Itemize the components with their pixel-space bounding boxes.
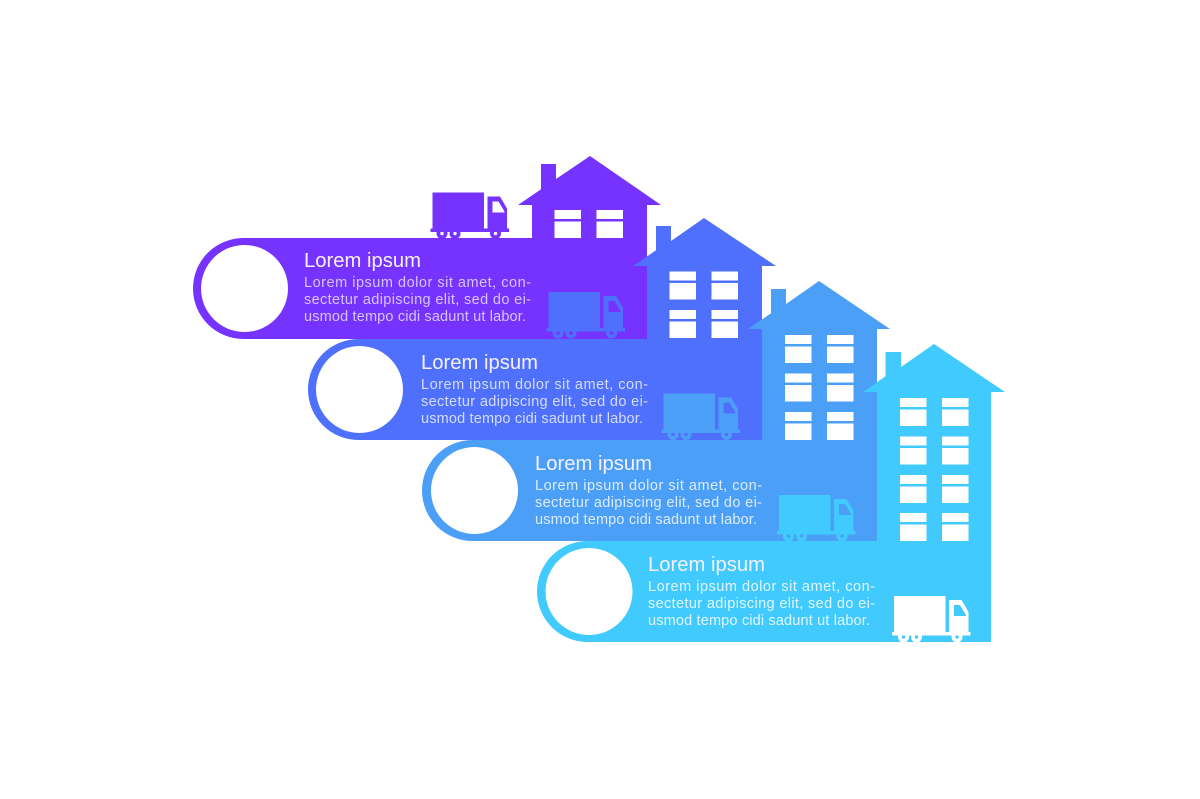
text block 4	[648, 554, 875, 629]
truck 4 on house 3 base	[777, 495, 856, 540]
house 2 silhouette	[308, 218, 776, 440]
body text 3: Lorem ipsum dolor sit amet, con-	[535, 478, 762, 494]
row 2: blue banner and house	[308, 218, 776, 440]
circle placeholder 4	[546, 548, 632, 635]
circle placeholder 1	[201, 245, 288, 332]
body text 1: sectetur adipiscing elit, sed do ei-	[304, 292, 531, 308]
heading 1: Lorem ipsum	[304, 250, 421, 272]
text block 1	[304, 250, 531, 325]
body text 3: sectetur adipiscing elit, sed do ei-	[535, 495, 762, 511]
heading 3: Lorem ipsum	[535, 453, 652, 475]
truck 3	[662, 394, 740, 438]
house 3 silhouette	[422, 281, 890, 541]
body text 4: Lorem ipsum dolor sit amet, con-	[648, 579, 875, 595]
text block 2	[421, 352, 648, 427]
house 4 windows	[900, 398, 968, 541]
house 1 silhouette	[193, 156, 661, 339]
circle placeholder 2	[316, 346, 403, 433]
truck 1 on roofline	[430, 192, 509, 237]
house 4 silhouette	[537, 344, 1005, 642]
row 4: cyan banner and house	[537, 344, 1005, 642]
circle placeholder 3	[431, 447, 518, 534]
body text 4: usmod tempo cidi sadunt ut labor.	[648, 613, 870, 629]
body text 1	[304, 275, 531, 325]
body text 3	[535, 478, 762, 528]
house 3 windows	[785, 335, 854, 440]
body text 2: usmod tempo cidi sadunt ut labor.	[421, 411, 643, 427]
body text 4: sectetur adipiscing elit, sed do ei-	[648, 596, 875, 612]
row 3: mid blue banner and house	[422, 281, 890, 541]
body text 3: usmod tempo cidi sadunt ut labor.	[535, 512, 757, 528]
body text 2: sectetur adipiscing elit, sed do ei-	[421, 394, 648, 410]
truck 2	[546, 292, 625, 337]
row 1: purple banner and house	[193, 156, 661, 339]
truck 5 white	[892, 596, 970, 641]
body text 4	[648, 579, 875, 629]
text block 3	[535, 453, 762, 528]
house 1 windows	[554, 210, 623, 238]
heading 4: Lorem ipsum	[648, 554, 765, 576]
heading 2: Lorem ipsum	[421, 352, 538, 374]
house 2 windows	[670, 272, 738, 338]
body text 1: Lorem ipsum dolor sit amet, con-	[304, 275, 531, 291]
body text 1: usmod tempo cidi sadunt ut labor.	[304, 309, 526, 325]
body text 2	[421, 377, 648, 427]
body text 2: Lorem ipsum dolor sit amet, con-	[421, 377, 648, 393]
